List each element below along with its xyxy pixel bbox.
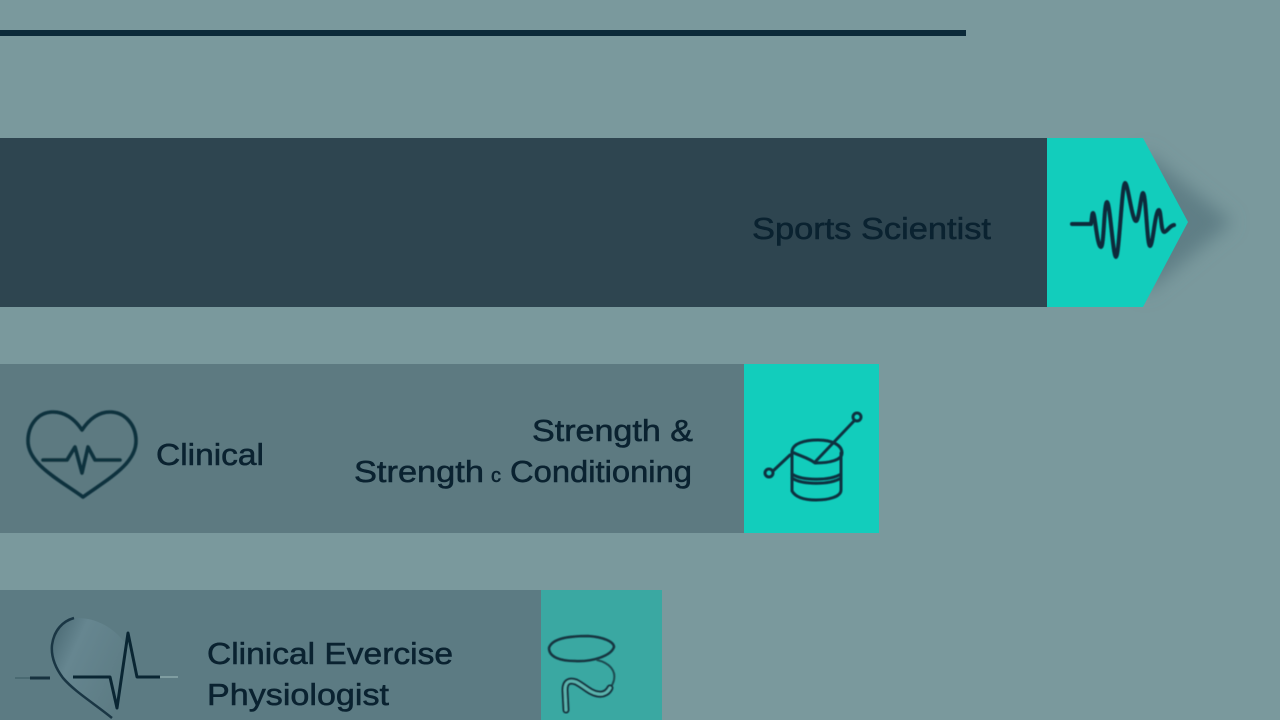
bar: sports scientist: [0, 138, 1047, 307]
bar: strength and conditioning: [0, 364, 744, 533]
icon: heart with pulse: [28, 412, 136, 497]
panel: clinical exercise physiologist: [0, 590, 662, 720]
ecg line: [73, 633, 160, 708]
tab: clinical exercise physiologist: [541, 590, 662, 720]
icon: intestine: [549, 636, 614, 710]
title rule: [0, 30, 966, 36]
label: sports scientist: Sports Scientist: [752, 211, 991, 246]
icon: waveform: [1072, 183, 1174, 257]
label: clinical: Clinical: [156, 437, 264, 472]
label: strength c conditioning: Strength: [354, 454, 484, 489]
arrow shadow: [1143, 150, 1232, 295]
label: strength c conditioning: [354, 454, 692, 489]
label: strength c conditioning: c: [491, 465, 501, 487]
label: strength and: Strength &: [532, 413, 693, 448]
half heart: [52, 618, 130, 720]
icon: half heart with ecg: [15, 618, 178, 720]
arrow tip: sports scientist: [1047, 138, 1188, 307]
bar: clinical exercise physiologist: [0, 590, 541, 720]
panel: strength and conditioning: [0, 364, 879, 533]
label: physiologist: Physiologist: [207, 677, 389, 712]
tab: strength and conditioning: [744, 364, 879, 533]
label: clinical exercise: Clinical Evercise: [207, 636, 453, 671]
icon: weight drum: [765, 413, 861, 500]
panel: sports scientist: [0, 138, 1232, 307]
label: strength c conditioning: Conditioning: [510, 454, 692, 489]
